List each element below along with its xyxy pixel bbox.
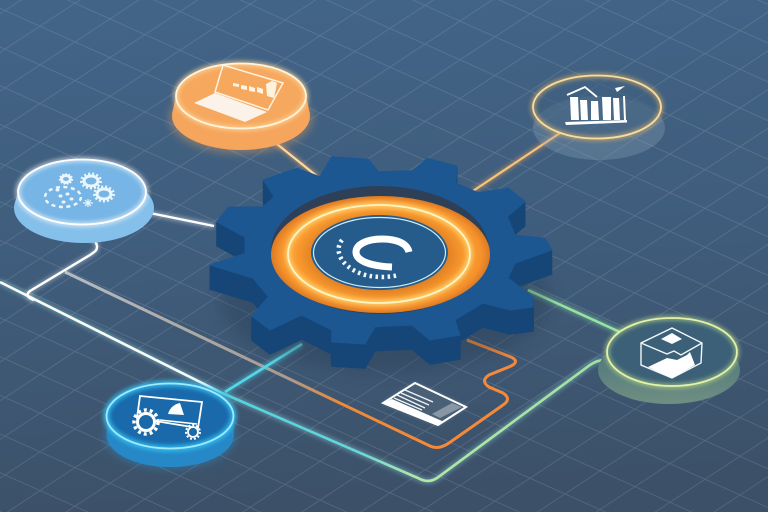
connector: long white, teal and green line (0, 282, 607, 481)
connector: orange top disc to gear (257, 128, 318, 177)
icon: card with text lines (383, 383, 466, 425)
disc: blue screen and gears module (104, 384, 236, 469)
gear ground shadow (220, 228, 550, 372)
center C symbol (356, 239, 409, 267)
gear recess shadow (271, 186, 489, 314)
connector: grey fading to orange circuit line (65, 272, 516, 447)
disc: orange laptop module (169, 64, 313, 154)
connector: light blue disc to gear (135, 210, 214, 226)
icon: cube with terrain (641, 328, 702, 378)
connector: teal line to gear (225, 344, 302, 392)
disc: green cube module (598, 318, 740, 404)
disc: light blue cog cluster module (14, 160, 154, 243)
orange glowing channel (271, 196, 490, 313)
disc: translucent bar chart module (533, 76, 665, 160)
icon: bar chart with rising line (565, 86, 627, 125)
glowing inner ring (288, 205, 470, 303)
icon: screen with gears (134, 396, 202, 439)
center hub outline (314, 218, 446, 288)
center hub disc (311, 215, 448, 290)
central gear (210, 157, 552, 372)
connector: green line to gear (528, 290, 622, 333)
connector: white branch from light blue disc (28, 225, 97, 300)
gear top face (210, 157, 552, 344)
gear extruded side wall (210, 159, 552, 368)
icon: laptop with bar chart (194, 65, 283, 122)
connector: top right disc to gear (473, 133, 560, 191)
icon: gears and dots (45, 174, 114, 207)
center progress ticks (339, 240, 398, 277)
